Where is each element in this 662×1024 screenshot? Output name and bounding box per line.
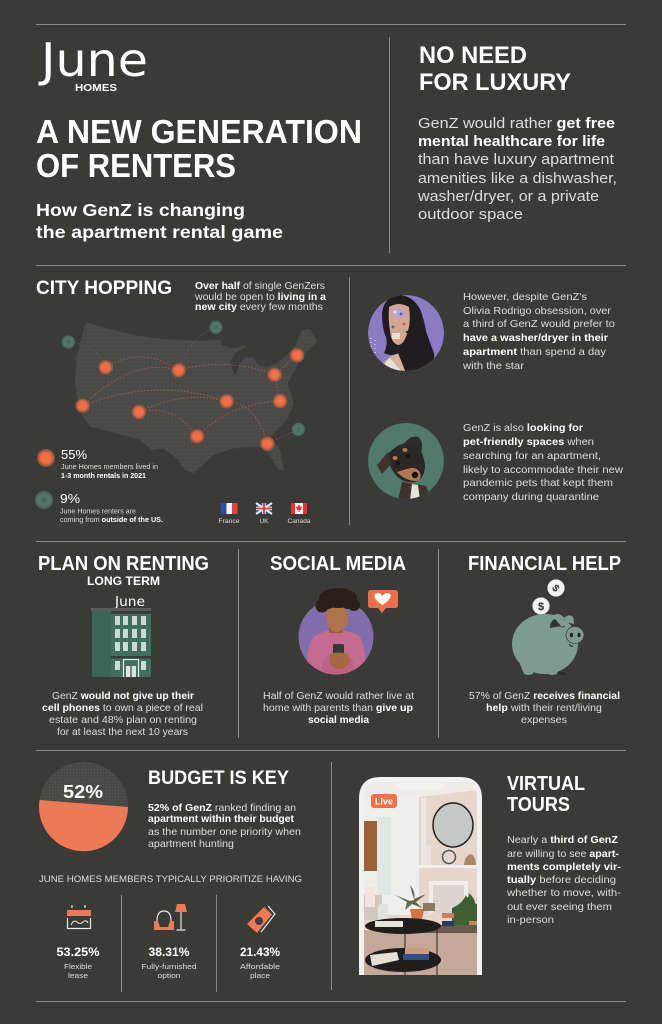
text: city hopping intro (194, 281, 326, 313)
text: virtual tours: Nearly a third of GenZ (507, 834, 619, 846)
heading: no need for luxury (419, 42, 571, 96)
stat: affordable place: 21.43% (240, 945, 280, 959)
heading: social media: SOCIAL MEDIA (270, 553, 406, 575)
text: financial help: help with their rent/living (486, 702, 602, 714)
stat: flexible lease: Flexible (64, 962, 92, 971)
text: pet-friendly: company during quarantine (463, 491, 599, 503)
legend: 55 percent: 1-3 month rentals in 2021 (61, 473, 146, 480)
stat: fully-furnished option (142, 945, 196, 980)
title: A NEW GENERATION (36, 113, 362, 150)
text: city hopping intro: would be open to living in a (194, 292, 326, 303)
photo: Olivia Rodrigo (368, 295, 444, 373)
icon: calendar (67, 905, 91, 928)
text: no need for luxury: GenZ would rather get free (418, 115, 615, 132)
title: OF RENTERS (36, 147, 236, 184)
heading: plan on renting: LONG TERM (87, 574, 160, 588)
text: social media: Half of GenZ would rather live at (263, 690, 414, 702)
subtitle: the apartment rental game (36, 222, 283, 242)
text: Olivia Rodrigo: with the star (462, 360, 525, 372)
text: social media (263, 690, 414, 726)
icon: money (247, 906, 275, 933)
stat: fully-furnished option: Fully-furnished (142, 962, 196, 971)
text: budget is key: as the number one priority when (148, 826, 301, 838)
text: pet-friendly: pet-friendly spaces when (463, 436, 594, 448)
text: no need for luxury: amenities like a dishwasher, (418, 170, 617, 187)
icon: June building (91, 595, 151, 677)
text: Olivia Rodrigo (462, 291, 615, 372)
heading: virtual tours (507, 772, 585, 816)
text: virtual tours: whether to move, with- (506, 887, 622, 899)
text: no need for luxury (417, 115, 617, 223)
text: Olivia Rodrigo: have a washer/dryer in their (463, 332, 608, 344)
heading: no need for luxury: NO NEED (419, 42, 527, 69)
text: plan on renting: cell phones to own a piece of real (42, 702, 203, 714)
stat: fully-furnished option: 38.31% (148, 945, 190, 959)
photo: woman with phone (298, 588, 374, 680)
stat: flexible lease (56, 945, 100, 980)
text: financial help (469, 690, 620, 726)
flag: Canada: Canada (288, 518, 311, 525)
heading: virtual tours: TOURS (507, 793, 570, 816)
flag: Canada (288, 503, 311, 525)
text: no need for luxury: washer/dryer, or a private (417, 188, 599, 205)
icon: piggy bank with coins: $ (538, 601, 544, 613)
text: budget is key: 52% of GenZ ranked finding an (148, 802, 296, 814)
text: social media: social media (308, 714, 369, 726)
phone: virtual tour (359, 777, 482, 975)
subheading: priorities: JUNE HOMES MEMBERS TYPICALLY PRIORITIZE HAVING (39, 874, 302, 885)
text: no need for luxury: than have luxury apartment (418, 151, 615, 168)
text: pet-friendly: searching for an apartment, (463, 450, 601, 462)
title (36, 113, 362, 184)
text: budget is key: apartment within their budget (148, 813, 294, 825)
subtitle (36, 200, 283, 242)
legend: 9 percent: June Homes renters are (60, 508, 136, 516)
text: budget is key (148, 802, 301, 850)
stat: flexible lease: 53.25% (56, 945, 100, 959)
text: virtual tours: out ever seeing them (507, 901, 612, 913)
text: pet-friendly: likely to accommodate their new (463, 464, 623, 476)
stat: flexible lease: lease (68, 971, 88, 980)
stat: affordable place: Affordable (240, 962, 280, 971)
logo: June Homes: HOMES (75, 83, 117, 94)
icon: June building: June (114, 595, 145, 610)
icon: like bubble (368, 590, 398, 613)
text: social media: home with parents than give up (263, 702, 413, 714)
legend: 9 percent: 9% (60, 492, 80, 506)
icon: sofa and lamp (154, 904, 187, 930)
text: no need for luxury: outdoor space (418, 206, 523, 223)
text: virtual tours: tually before deciding (507, 874, 616, 886)
flag: UK (256, 503, 272, 525)
pie chart: 52 percent (39, 762, 128, 851)
text: plan on renting (42, 690, 203, 738)
photo: dog (368, 423, 444, 500)
stat: affordable place: place (250, 971, 270, 980)
pie chart: 52 percent: 52% (63, 781, 103, 802)
text: city hopping intro: new city every few months (195, 302, 323, 313)
text: plan on renting: estate and 48% plan on renting (49, 714, 197, 726)
text: plan on renting: GenZ would not give up their (52, 690, 194, 702)
label: live badge (371, 794, 397, 808)
map: United States with routes (62, 321, 317, 473)
text: virtual tours: in-person (507, 914, 554, 926)
text: Olivia Rodrigo: a third of GenZ would prefer to (463, 318, 615, 330)
text: pet-friendly: pandemic pets that kept them (463, 477, 613, 489)
stat: affordable place (240, 945, 280, 980)
text: plan on renting: for at least the next 10 years (57, 726, 188, 738)
heading: financial help: FINANCIAL HELP (468, 553, 621, 575)
legend: 55 percent: June Homes members lived in (61, 464, 158, 471)
legend: 9 percent (35, 491, 163, 524)
stat: fully-furnished option: option (158, 971, 180, 980)
text: Olivia Rodrigo: However, despite GenZ's (463, 291, 587, 303)
icon: piggy bank with coins (512, 580, 584, 675)
text: financial help: 57% of GenZ receives financial (469, 690, 620, 702)
text: virtual tours: are willing to see apart- (507, 848, 619, 860)
text: Olivia Rodrigo: apartment than spend a day (463, 346, 607, 358)
heading: plan on renting (38, 553, 209, 588)
subtitle: How GenZ is changing (36, 200, 245, 220)
heading: plan on renting: PLAN ON RENTING (38, 553, 209, 575)
heading: budget is key: BUDGET IS KEY (148, 768, 289, 789)
flag: France: France (218, 518, 240, 525)
text: pet-friendly: GenZ is also looking for (463, 422, 583, 434)
text: city hopping intro: Over half of single GenZers (195, 281, 325, 292)
label: live badge: Live (375, 796, 393, 808)
legend: 55 percent: 55% (61, 448, 87, 462)
heading: no need for luxury: FOR LUXURY (419, 69, 571, 96)
heading: city hopping: CITY HOPPING (36, 277, 172, 299)
text: virtual tours (506, 834, 622, 926)
flag: UK: UK (260, 518, 269, 525)
text: budget is key: apartment hunting (148, 838, 234, 850)
legend: 55 percent (37, 448, 158, 480)
text: no need for luxury: mental healthcare for life (418, 133, 605, 150)
heading: virtual tours: VIRTUAL (507, 772, 585, 795)
text: financial help: expenses (521, 714, 567, 726)
text: Olivia Rodrigo: Olivia Rodrigo obsession, over (463, 305, 612, 317)
icon: piggy bank with coins: $ (549, 583, 561, 595)
logo: June Homes: June (38, 33, 148, 87)
text: pet-friendly (463, 422, 623, 503)
flag: France (218, 503, 240, 525)
text: virtual tours: ments completely vir- (507, 861, 622, 873)
legend: 9 percent: coming from outside of the US. (60, 517, 163, 524)
